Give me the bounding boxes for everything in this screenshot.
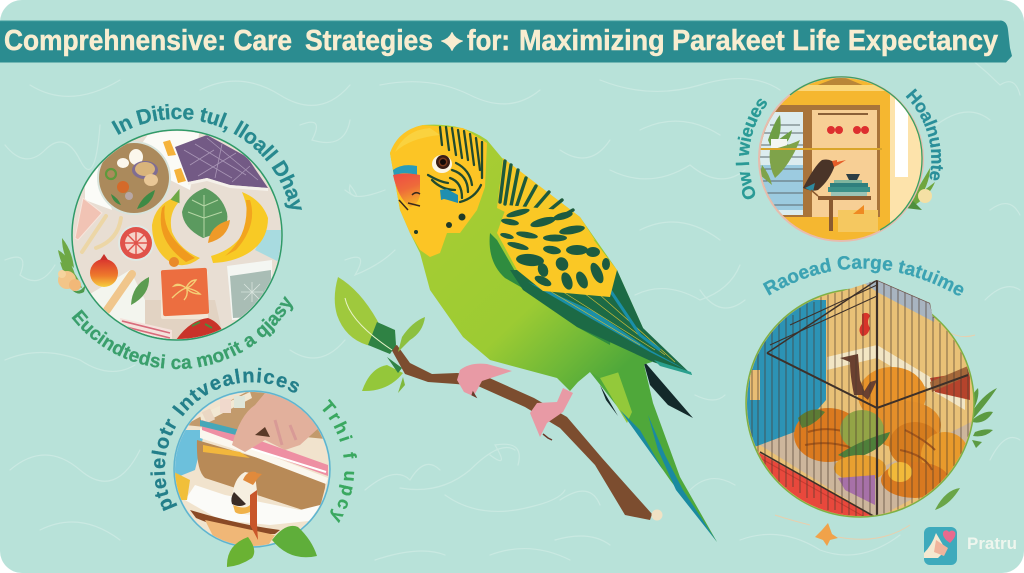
title banner: Strategies <box>305 25 433 57</box>
logo icon <box>924 527 957 565</box>
neck stripes <box>497 158 595 240</box>
curved heading: housing right: Hoalnumte <box>906 88 943 180</box>
green leaf <box>182 188 230 243</box>
icon: left leaf <box>227 537 254 567</box>
tomato slice <box>118 225 154 261</box>
cage frame <box>760 280 968 518</box>
red book <box>161 268 209 319</box>
end knot <box>652 510 662 520</box>
curved heading: vet left: pteielotr Intvealnices <box>150 368 299 512</box>
tail <box>590 360 717 542</box>
snow <box>185 485 320 525</box>
logo wordmark: Pratru <box>967 534 1017 553</box>
cage bars <box>752 281 968 518</box>
brown box <box>197 440 326 515</box>
vet scene illustration <box>175 392 329 546</box>
parakeet illustration <box>335 125 717 542</box>
throat spots <box>414 214 466 234</box>
purple cloth <box>175 135 268 191</box>
branch <box>190 510 280 534</box>
beak <box>393 174 420 207</box>
cere <box>393 165 417 176</box>
curved caption: diet bottom: Eucindtedsi ca morit a qjasy <box>72 296 294 370</box>
tail feathers dark <box>643 360 693 418</box>
large leaf <box>335 277 396 354</box>
silhouette birds <box>840 354 866 395</box>
tail lime patch <box>597 372 632 423</box>
title banner: for: <box>467 25 510 57</box>
title banner: Maximizing Parakeet Life Expectancy <box>519 25 998 57</box>
pink cutting board <box>75 198 102 240</box>
hand <box>232 393 322 452</box>
window with blinds <box>757 112 803 215</box>
right banana <box>211 192 268 263</box>
wing coverts <box>497 205 617 297</box>
panel: housing circle <box>736 76 943 242</box>
grey box <box>227 260 273 320</box>
small rooster <box>860 313 870 336</box>
right foot <box>530 388 573 440</box>
head stripes <box>428 127 482 202</box>
curved heading: cage: Raoead Carge tatuime <box>762 256 964 296</box>
orange pumpkins <box>794 367 969 498</box>
eye <box>432 155 452 173</box>
tomato wedge <box>176 318 222 339</box>
tail blue streaks <box>620 410 717 542</box>
beige panel <box>812 110 877 217</box>
branch <box>390 345 652 520</box>
cheek patch <box>440 189 458 203</box>
pomegranate <box>90 254 118 287</box>
lilac cushion <box>838 475 875 505</box>
curved heading: diet top: In Ditice tul, lloall Dhay <box>111 104 302 210</box>
stacked cards <box>200 420 328 484</box>
head yellow mask <box>390 125 487 257</box>
icon: orange flower <box>815 523 838 546</box>
left foot <box>457 364 512 397</box>
perched bird <box>803 160 846 196</box>
striped pink napkin <box>120 318 172 339</box>
food plate illustration <box>70 128 285 345</box>
body <box>390 125 652 391</box>
small upper leaf <box>398 317 425 352</box>
panel: cage circle <box>745 256 997 546</box>
primary wing feathers <box>510 270 692 375</box>
table <box>818 196 871 231</box>
cage floor <box>760 420 975 518</box>
stew bowl <box>97 141 171 215</box>
left banana <box>152 197 200 265</box>
title banner <box>0 20 1012 62</box>
cage illustration <box>745 280 975 530</box>
icon: flower sprig <box>905 168 935 210</box>
breadsticks <box>82 216 121 252</box>
red fruit <box>827 126 869 134</box>
stacked books <box>828 174 870 196</box>
small dark feather <box>600 385 618 416</box>
icon: corner flower and leaves <box>58 238 86 294</box>
small bird <box>231 472 262 540</box>
title banner: Comprehnensive: Care <box>4 25 292 57</box>
icon: cage side leaves <box>935 388 997 510</box>
curved caption: vet right: Trhi f upcy <box>322 398 357 523</box>
icon: right leaf <box>272 526 317 557</box>
butter pieces <box>163 140 186 183</box>
curved heading: housing left: Ow l wieues <box>736 98 767 200</box>
dark green wing shade <box>490 233 612 345</box>
room illustration <box>760 78 922 240</box>
panel: vet circle <box>150 368 357 567</box>
lower leaf <box>362 357 405 393</box>
blue wall <box>745 300 826 450</box>
panel: diet circle <box>58 104 302 370</box>
